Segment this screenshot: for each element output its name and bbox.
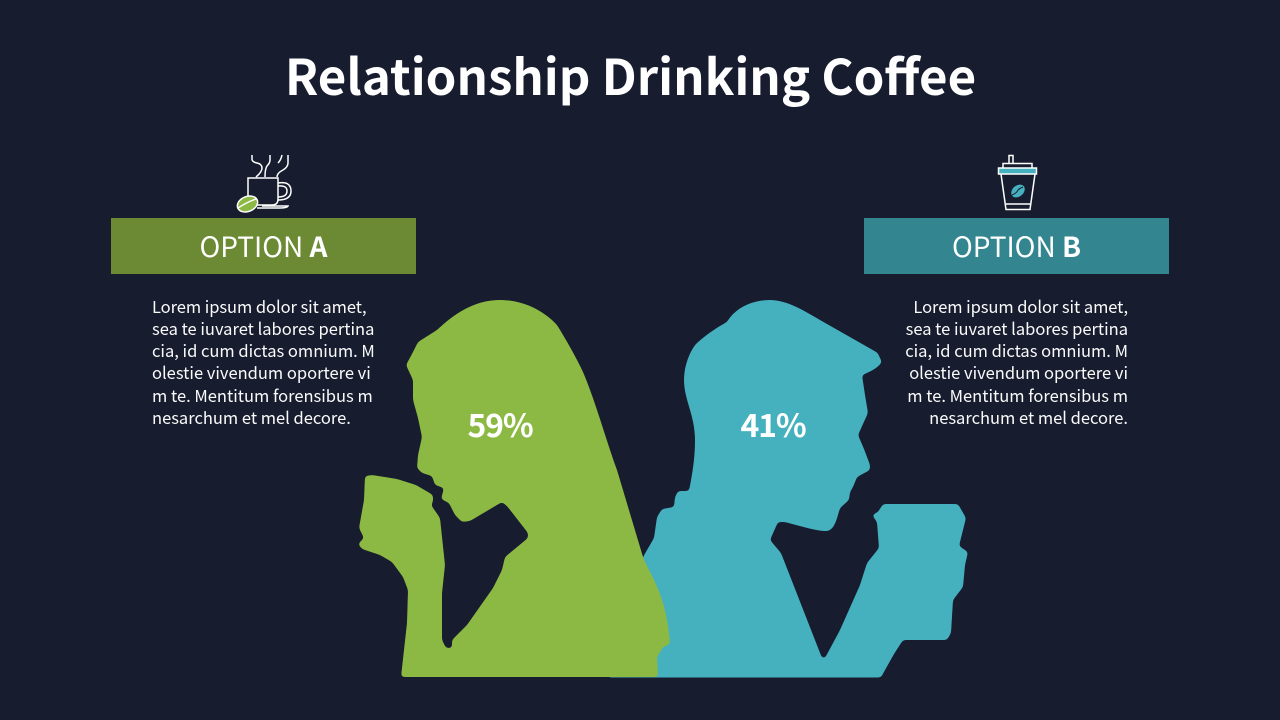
panel: option B header xyxy=(864,218,1169,274)
label: 59%: 59% xyxy=(468,401,532,447)
text block: option A: Lorem ipsum dolor sit amet, xyxy=(152,294,367,318)
text block: option A: m te. Mentitum forensibus m xyxy=(152,383,373,407)
text block: option A: nesarchum et mel decore. xyxy=(152,405,351,429)
text block: option B: sea te iuvaret labores pertina xyxy=(906,316,1128,340)
panel: option A header xyxy=(111,218,416,274)
text block: option B xyxy=(905,294,1128,429)
text block: option B: cia, id cum dictas omnium. M xyxy=(905,338,1128,362)
text block: option A: sea te iuvaret labores pertina xyxy=(152,316,374,340)
text block: option B: m te. Mentitum forensibus m xyxy=(907,383,1128,407)
text block: option B: nesarchum et mel decore. xyxy=(929,405,1128,429)
text block: option A: olestie vivendum oportere vi xyxy=(152,360,371,384)
text block: option B: Lorem ipsum dolor sit amet, xyxy=(913,294,1128,318)
panel: option B header: OPTION B xyxy=(952,226,1081,266)
text block: option A xyxy=(152,294,375,429)
text block: option B: olestie vivendum oportere vi xyxy=(909,360,1128,384)
title: Relationship Drinking Coffee xyxy=(285,38,976,110)
label: 41%: 41% xyxy=(740,401,805,447)
text block: option A: cia, id cum dictas omnium. M xyxy=(152,338,375,362)
panel: option A header: OPTION A xyxy=(200,226,327,266)
